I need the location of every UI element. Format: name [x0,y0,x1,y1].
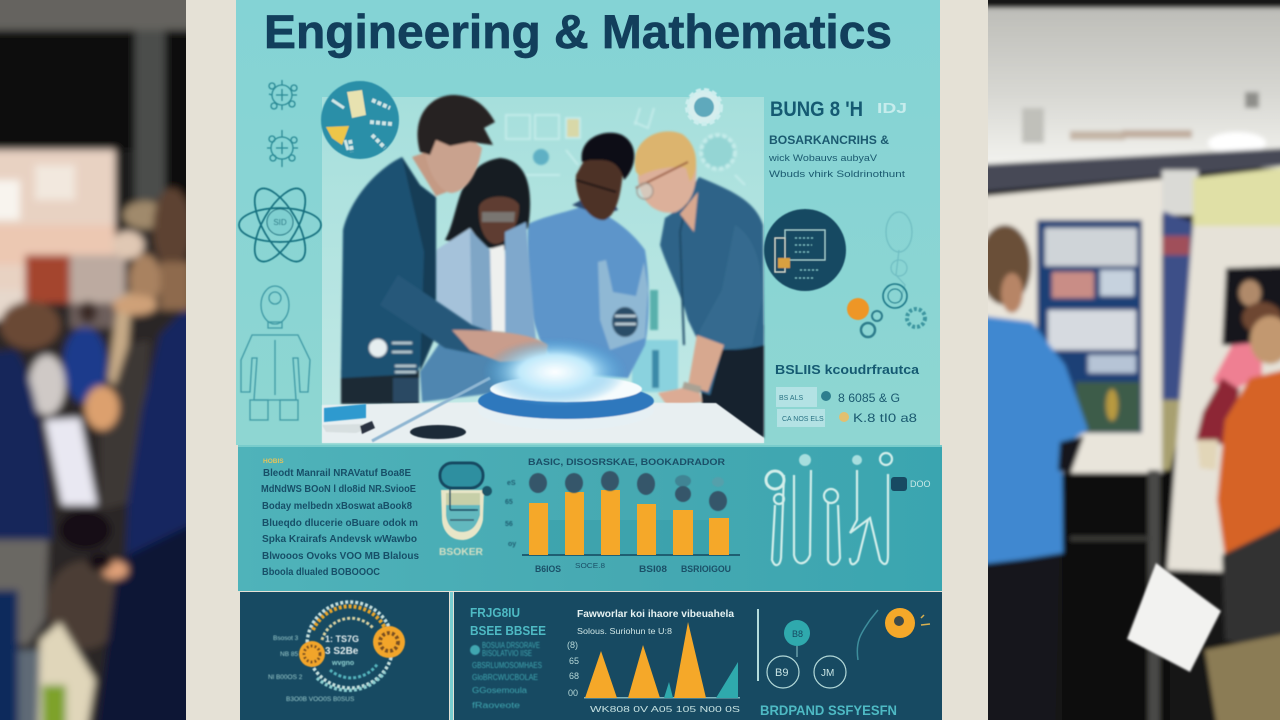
icon: molecule top [269,80,297,110]
text block: intro label: HOBIS [263,458,284,465]
axis labels: oy [508,541,516,548]
capsule caption: BSOKER [439,547,484,558]
text block: left paragraph: Blueqdo dlucerie oBuare odok m [262,518,418,529]
title: Engineering & Mathematics [264,5,892,58]
text block: left paragraph: Bleodt Manrail NRAVatuf Boa8E [263,468,411,479]
outer labels: B3O0B VOO0S B0SUS [286,696,355,703]
icon: ring [883,284,907,308]
y-axis labels: 68 [569,671,579,681]
bar labels: BSRIOIGOU [681,564,731,574]
mini legend row two [777,409,917,427]
mini legend row two: K.8 tI0 a8 [853,411,917,425]
axis line [522,554,740,556]
center stats: 3 S2Be [325,646,359,657]
poster board frame [186,0,988,720]
y-axis labels: (8) [567,640,578,650]
left orange node [299,641,325,667]
shirt badge [369,339,387,357]
outer labels: NB 85 [280,651,298,658]
poster [236,0,942,720]
list lines: BISOLATVIO IISE [482,649,532,658]
text block: left paragraph: Boday melbedn xBoswat aBook8 [262,501,412,512]
outer labels: Bsosot 3 [273,635,299,642]
icon: gear over photo [687,90,721,124]
circular process diagram [268,586,409,704]
mini legend row one [776,387,900,407]
list lines: BOSUIA DRSORAVE [482,641,540,650]
lab table [322,402,764,443]
icon: orange target [885,608,930,638]
panel: middle teal band [238,445,942,591]
mini legend row two: CA NOS ELS [782,416,824,423]
bar labels: SOCE.8 [575,563,605,570]
icon: outline node right: JM [821,668,834,679]
bar chart [505,457,740,574]
peaks [585,622,706,698]
icon: robot outline [241,286,310,420]
faint right doodles [886,212,912,300]
panel: dark lower right [450,592,942,720]
list lines: fRaoveote [472,701,521,710]
list lines [470,641,542,710]
background: blurred exhibition hall left [0,0,200,720]
person: man in dark blue shirt [341,95,548,404]
icon: outline node right [814,656,846,688]
background people left [0,188,200,720]
background: blurred exhibition hall right [975,0,1280,720]
right column text line one: wick Wobauvs aubyaV [768,153,878,164]
axis line [584,697,740,698]
chart title: BASIC, DISOSRSKAE, BOOKADRADOR [528,457,725,468]
photo panel backdrop [322,97,764,443]
bar labels: BSI08 [639,564,667,574]
lab jars in background [632,290,678,392]
right column heading: BUNG 8 'H [770,98,863,121]
list lines: GGosemoula [472,686,528,695]
icon: orange light bulb [847,298,869,320]
atom nucleus label: SID [273,218,287,227]
poster upper teal panel [236,0,940,445]
divider [757,609,759,681]
mini legend row one: BS ALS [779,395,803,402]
chart title: Fawworlar koi ihaore vibeuahela [577,608,734,620]
axis labels: eS [507,480,516,487]
icon: test tube diagram [766,453,892,565]
faint science doodles [506,108,745,185]
glowing device [478,338,654,430]
axis labels [505,480,516,548]
icon: outline node left: B9 [775,667,788,679]
icon: atom [239,181,321,269]
x-axis labels: WK808 0V A05 105 N00 0S [590,704,740,714]
bottom caption: BRDPAND SSFYESFN [760,702,897,718]
icon: teal node [784,620,810,646]
center stats [325,634,359,667]
y-axis labels: 65 [569,656,579,666]
chart backing bars [549,520,729,555]
squiggle [857,610,878,660]
heading: bottom panel second: BSEE BBSEE [470,623,546,638]
person: woman with braids [420,158,536,402]
loose paper sheet [1127,563,1221,672]
y-axis labels [567,640,579,698]
person: man in light blue tee [526,133,649,378]
list lines: GBSRLUMOSOMHAES [472,661,542,670]
text block: left paragraph [261,468,419,578]
text block: left paragraph: Bboola dlualed BOBOOOC [262,567,380,578]
triangle chart [567,608,740,714]
axis labels: 65 [505,499,513,506]
outer labels: Nl B00OS 2 [268,674,303,681]
right column subheading: BOSARKANCRIHS & [769,135,889,147]
chart subtitle: Solous. Suriohun te U:8 [577,627,673,636]
node connector [796,646,798,657]
icon: teal node: B8 [792,629,803,639]
right column badge: IDJ [877,100,907,117]
list lines: GloBRCWUCBOLAE [472,673,538,682]
right column text line two: Wbuds vhirk Soldrinothunt [769,169,905,180]
center stats: 1: TS7G [325,634,359,644]
tube diagram legend [891,477,931,491]
axis labels: 56 [505,521,513,528]
background people right [975,225,1280,720]
icon: molecule second [267,130,298,167]
center stats: wvgno [331,660,354,667]
bar head icons [529,471,727,511]
heading: bottom panel left: FRJG8IU [470,605,520,620]
person: woman in denim shirt [635,131,764,438]
text block: left paragraph: Spka Krairafs Andevsk wWawbo [262,534,417,545]
bar labels: B6IOS [535,564,561,574]
table tools [322,378,490,441]
bar labels [535,563,731,574]
bars [529,490,729,555]
dark circuit badge [764,209,846,291]
right orange node [373,626,405,658]
device glow [483,338,627,406]
mini legend row one: 8 6085 & G [838,391,900,405]
people group photo [322,95,764,443]
icon: capsule device [439,463,492,558]
text block: left paragraph: MdNdWS BOoN l dlo8id NR.SviooE [261,484,416,495]
mini section heading: BSLIIS kcoudrfrautca [775,362,920,377]
icon: circular science badge [321,81,399,159]
text block: left paragraph: Blwooos Ovoks VOO MB Blalous [262,551,419,562]
y-axis labels: 00 [568,688,578,698]
outer labels [268,635,355,703]
icon cluster: small gears [861,309,925,337]
tube diagram legend: DOO [910,479,931,489]
icon: outline node left [767,656,799,688]
panel: dark lower left [240,586,449,720]
